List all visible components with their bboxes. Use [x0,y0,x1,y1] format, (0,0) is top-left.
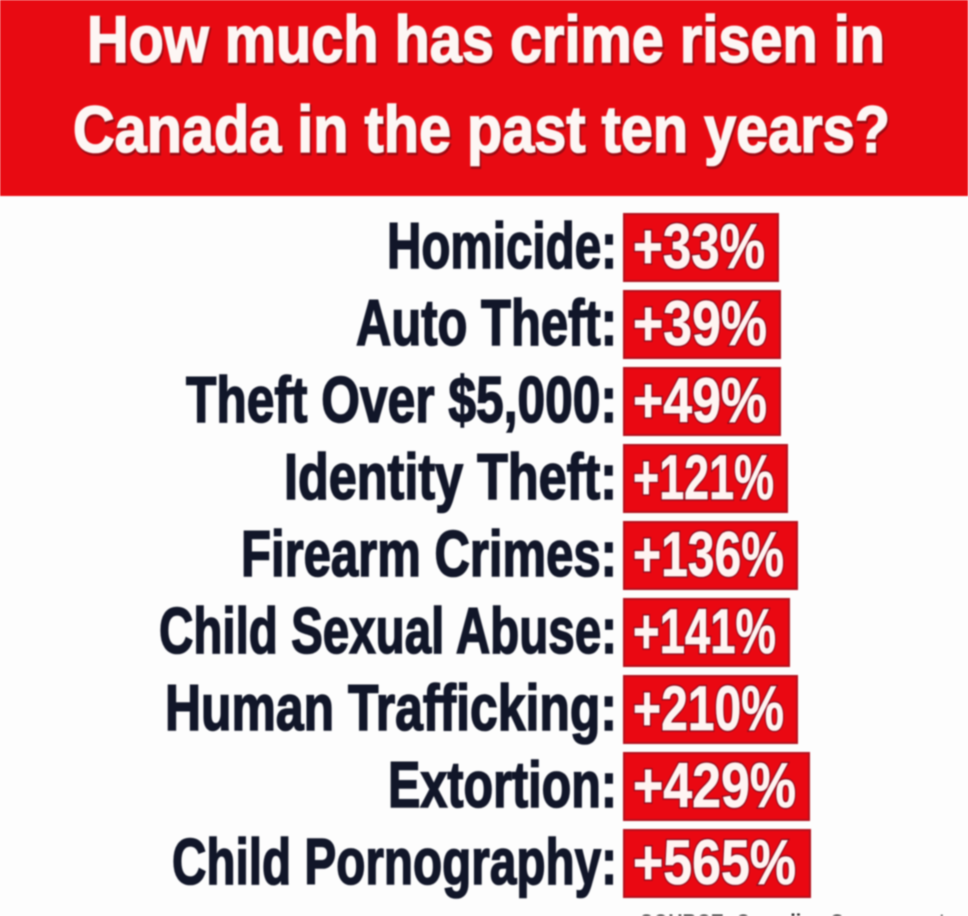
row: identity theft: +121% [633,443,774,513]
row: child pornography: Child Pornography: [172,825,617,898]
row: identity theft: Identity Theft: [284,440,617,513]
row: theft over $5,000: Theft Over $5,000: [186,363,617,436]
row: firearm crimes: Firearm Crimes: [241,517,617,590]
row: theft over $5,000: +49% [633,366,767,436]
row: child pornography: +565% [633,828,796,898]
row: homicide: Homicide: [387,209,617,282]
row: child pornography: +565% [633,828,796,898]
row: child sexual abuse: +141% [633,597,776,667]
row: theft over $5,000: +49% [633,366,767,436]
row: auto theft: +39% [633,289,767,359]
row: child sexual abuse: +141% [633,597,776,667]
row: extortion: Extortion: [388,748,617,821]
row: identity theft: +121% [633,443,774,513]
row: homicide: +33% [633,212,765,282]
row: human trafficking: Human Trafficking: [165,671,617,744]
row: human trafficking: +210% [633,674,784,744]
row: homicide: +33% [633,212,765,282]
row: firearm crimes: +136% [633,520,784,590]
row: firearm crimes: +136% [633,520,784,590]
row: extortion: +429% [633,751,796,821]
row: human trafficking: +210% [633,674,784,744]
row: auto theft: Auto Theft: [356,286,617,359]
row: auto theft: +39% [633,289,767,359]
row: child sexual abuse: Child Sexual Abuse: [159,594,617,667]
title [73,2,891,168]
header banner [0,0,968,196]
row: extortion: +429% [633,751,796,821]
